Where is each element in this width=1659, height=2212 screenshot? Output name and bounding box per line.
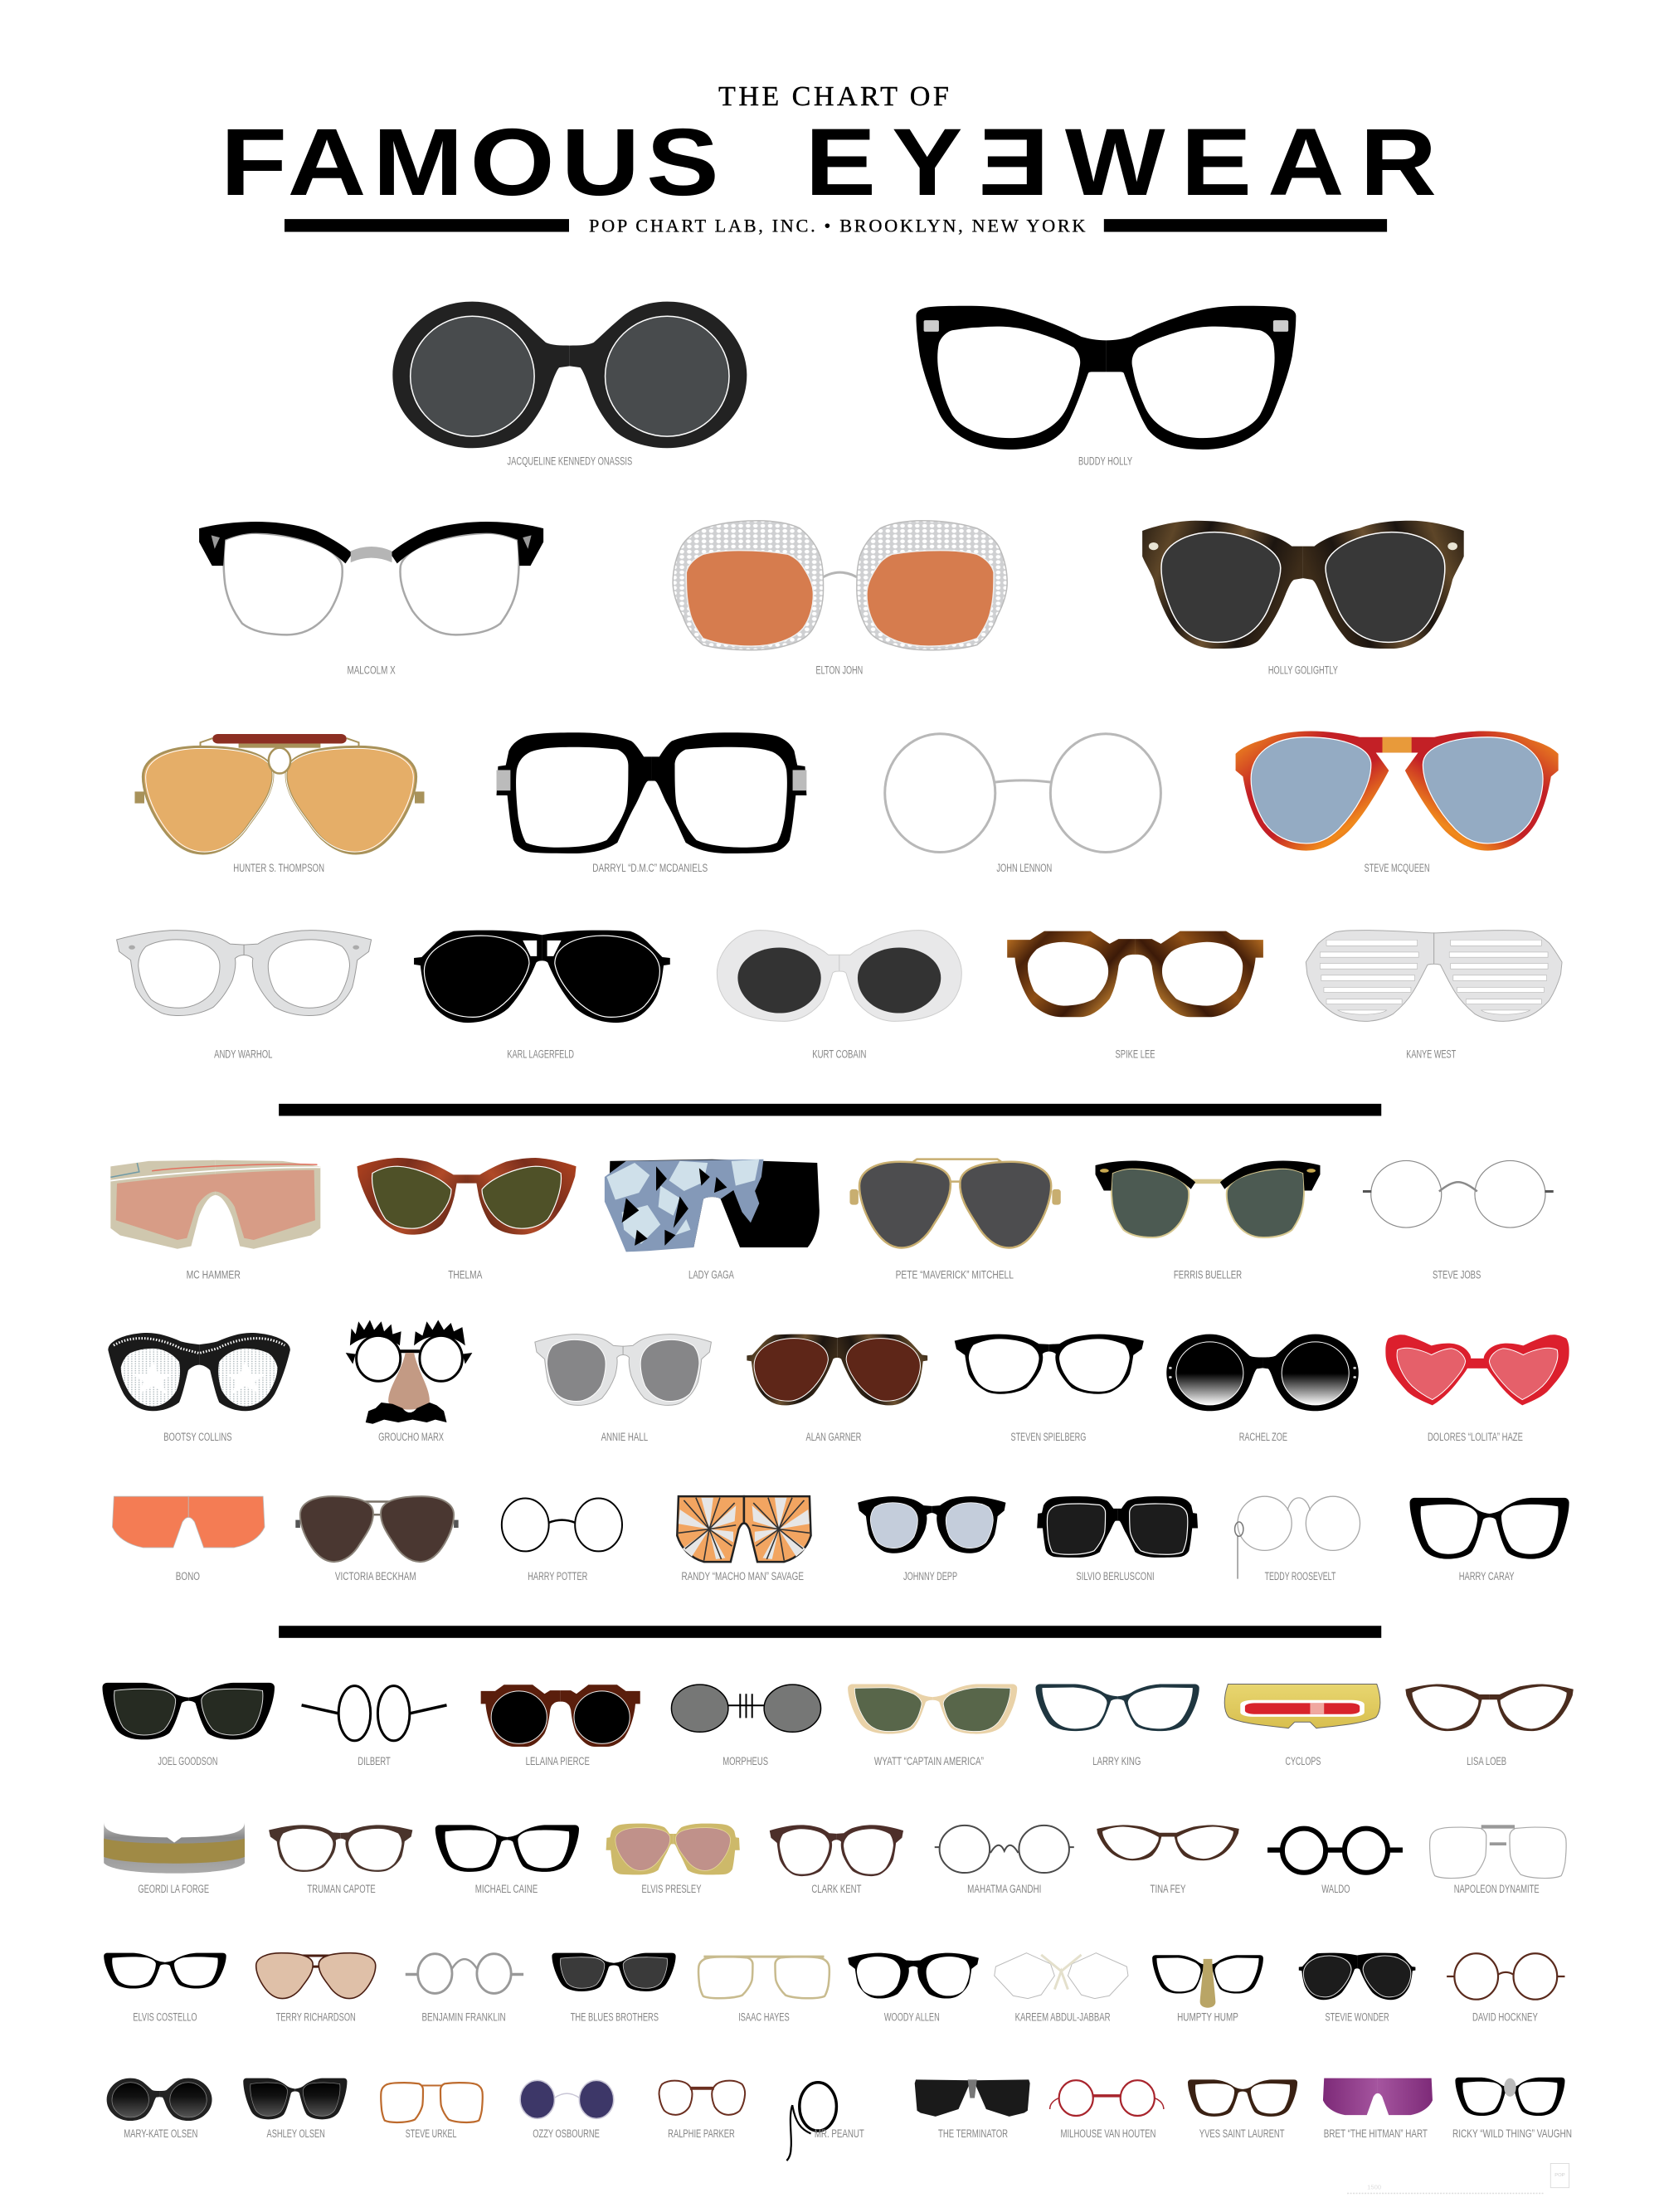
label: JOHN LENNON <box>996 862 1052 874</box>
title rule left <box>285 219 569 232</box>
title block <box>221 80 1452 236</box>
glasses: Hunter S. Thompson <box>134 734 425 874</box>
glasses: Tina Fey <box>1097 1825 1239 1895</box>
glasses: Mary-Kate Olsen <box>107 2078 212 2140</box>
glasses: Lelaina Pierce <box>481 1685 640 1767</box>
label: DILBERT <box>358 1755 391 1767</box>
main title: EYƎWEAR <box>805 109 1452 216</box>
kicker: the chart of: THE CHART OF <box>718 80 951 112</box>
mustache <box>366 1403 447 1424</box>
glasses: Spike Lee <box>1007 931 1263 1060</box>
label: TEDDY ROOSEVELT <box>1265 1570 1336 1582</box>
glasses: Humpty Hump <box>1152 1955 1263 2023</box>
label: CLARK KENT <box>811 1883 862 1895</box>
label: ANNIE HALL <box>601 1431 648 1443</box>
glasses: Lolita <box>1385 1334 1569 1443</box>
label: BUDDY HOLLY <box>1078 455 1132 467</box>
label: KAREEM ABDUL-JABBAR <box>1015 2010 1111 2023</box>
eyebrows <box>350 1320 465 1345</box>
label: DARRYL “D.M.C” MCDANIELS <box>592 862 708 874</box>
glasses: David Hockney <box>1447 1953 1564 2023</box>
label: RANDY “MACHO MAN” SAVAGE <box>681 1570 804 1582</box>
label: MALCOLM X <box>347 664 396 676</box>
label: MC HAMMER <box>187 1268 241 1281</box>
label: ELVIS COSTELLO <box>133 2010 197 2023</box>
glasses: Victoria Beckham <box>295 1496 459 1582</box>
glasses: Steve McQueen <box>1236 732 1559 874</box>
glasses: Ozzy Osbourne <box>520 2080 614 2140</box>
glasses: Woody Allen <box>848 1953 979 2023</box>
glasses: Wyatt <box>848 1685 1017 1767</box>
glasses: Holly Golightly <box>1142 521 1464 676</box>
label: MAHATMA GANDHI <box>967 1883 1041 1895</box>
glasses: Andy Warhol <box>117 931 372 1060</box>
glasses: Kareem Abdul-Jabbar <box>995 1953 1128 2023</box>
label: WYATT “CAPTAIN AMERICA” <box>874 1755 984 1767</box>
glasses: Maverick <box>849 1159 1061 1281</box>
glasses: Elton John <box>673 521 1007 676</box>
glasses: MC Hammer <box>110 1160 320 1281</box>
glasses: Benjamin Franklin <box>406 1954 523 2023</box>
glasses: Mr. Peanut monocle <box>786 2083 864 2161</box>
glasses: Bono <box>112 1496 265 1582</box>
glasses: Thelma <box>357 1158 577 1281</box>
glasses: Kurt Cobain <box>717 931 961 1060</box>
label: DAVID HOCKNEY <box>1472 2010 1538 2023</box>
glasses: Elvis Costello <box>104 1953 226 2023</box>
glasses: Alan Garner <box>747 1334 927 1443</box>
logo <box>1550 2163 1569 2188</box>
label: MARY-KATE OLSEN <box>124 2127 197 2140</box>
glasses: Cyclops <box>1224 1685 1380 1767</box>
glasses: Rachel Zoe <box>1166 1334 1359 1443</box>
label: SILVIO BERLUSCONI <box>1076 1570 1155 1582</box>
glasses: Ricky Vaughn <box>1452 2078 1572 2140</box>
glasses: Isaac Hayes <box>698 1957 830 2023</box>
label: BONO <box>176 1570 200 1582</box>
label: STEVE JOBS <box>1433 1268 1481 1281</box>
label: HARRY CARAY <box>1459 1570 1515 1582</box>
label: ELVIS PRESLEY <box>641 1883 701 1895</box>
label: HUMPTY HUMP <box>1177 2010 1238 2023</box>
glasses: Steve Urkel <box>381 2083 483 2140</box>
publisher line: POP CHART LAB, INC. • BROOKLYN, NEW YORK <box>589 216 1086 236</box>
label: NAPOLEON DYNAMITE <box>1454 1883 1540 1895</box>
glasses: Waldo <box>1267 1829 1403 1895</box>
label: ALAN GARNER <box>806 1431 861 1443</box>
label: MORPHEUS <box>722 1755 768 1767</box>
glasses: Steve Jobs <box>1363 1160 1554 1281</box>
glasses: Yves Saint Laurent <box>1188 2079 1297 2140</box>
title rule right <box>1104 219 1387 232</box>
label: RACHEL ZOE <box>1239 1431 1287 1443</box>
glasses: Harry Caray <box>1410 1498 1569 1582</box>
glasses: Michael Caine <box>435 1825 579 1895</box>
label: ELTON JOHN <box>816 664 863 676</box>
label: VICTORIA BECKHAM <box>335 1570 416 1582</box>
glasses: Bret Hart <box>1323 2078 1433 2140</box>
main title <box>221 109 1452 216</box>
glasses: Silvio Berlusconi <box>1037 1496 1198 1582</box>
glasses: Malcolm X <box>199 522 543 676</box>
glasses: Steven Spielberg <box>955 1334 1144 1443</box>
glasses: DMC <box>497 732 806 874</box>
label: RICKY “WILD THING” VAUGHN <box>1452 2127 1572 2140</box>
label: YVES SAINT LAURENT <box>1199 2127 1285 2140</box>
glasses: Geordi La Forge <box>104 1822 245 1895</box>
label: WOODY ALLEN <box>884 2010 940 2023</box>
glasses: Karl Lagerfeld <box>414 931 670 1060</box>
edition mark: 1500 <box>1367 2183 1381 2190</box>
glasses: The Terminator <box>915 2079 1030 2140</box>
label: HOLLY GOLIGHTLY <box>1268 664 1338 676</box>
glasses: Annie Hall <box>535 1334 711 1443</box>
label: PETE “MAVERICK” MITCHELL <box>896 1268 1014 1281</box>
glasses: Clark Kent <box>770 1825 903 1895</box>
label: CYCLOPS <box>1285 1755 1321 1767</box>
label: THE BLUES BROTHERS <box>571 2010 659 2023</box>
label: LARRY KING <box>1092 1755 1141 1767</box>
label: TINA FEY <box>1151 1883 1185 1895</box>
label: MR. PEANUT <box>815 2127 864 2140</box>
label: STEVE URKEL <box>406 2127 457 2140</box>
glasses: Lisa Loeb <box>1405 1685 1574 1767</box>
label: HARRY POTTER <box>528 1570 587 1582</box>
glasses: Blues Brothers <box>552 1953 676 2023</box>
label: BRET “THE HITMAN” HART <box>1324 2127 1428 2140</box>
label: HUNTER S. THOMPSON <box>233 862 324 874</box>
glasses: Ashley Olsen <box>243 2078 347 2140</box>
section divider <box>279 1104 1381 1116</box>
label: MICHAEL CAINE <box>475 1883 538 1895</box>
label: THE TERMINATOR <box>938 2127 1008 2140</box>
glasses: Terry Richardson <box>256 1953 376 2023</box>
label: FERRIS BUELLER <box>1174 1268 1242 1281</box>
glasses: Milhouse <box>1050 2080 1164 2140</box>
glasses: Teddy Roosevelt <box>1235 1496 1360 1582</box>
label: JOEL GOODSON <box>158 1755 217 1767</box>
label: ANDY WARHOL <box>214 1048 273 1060</box>
label: TERRY RICHARDSON <box>276 2010 356 2023</box>
glasses: Napoleon Dynamite <box>1430 1825 1566 1895</box>
section divider <box>279 1626 1381 1638</box>
glasses: Bootsy Collins <box>108 1333 290 1443</box>
glasses: Morpheus <box>671 1685 821 1767</box>
label: LADY GAGA <box>688 1268 735 1281</box>
glasses: Johnny Depp <box>858 1496 1005 1582</box>
label: GEORDI LA FORGE <box>138 1883 209 1895</box>
label: ASHLEY OLSEN <box>267 2127 325 2140</box>
glasses: Truman Capote <box>269 1825 412 1895</box>
logo: POP <box>1554 2173 1565 2178</box>
label: GROUCHO MARX <box>378 1431 444 1443</box>
nose <box>388 1353 430 1410</box>
glasses: Groucho Marx <box>346 1320 472 1443</box>
label: RALPHIE PARKER <box>668 2127 735 2140</box>
label: JOHNNY DEPP <box>903 1570 957 1582</box>
label: KURT COBAIN <box>812 1048 866 1060</box>
label: MILHOUSE VAN HOUTEN <box>1061 2127 1155 2140</box>
glasses: John Lennon <box>885 734 1160 874</box>
label: STEVIE WONDER <box>1325 2010 1389 2023</box>
label: SPIKE LEE <box>1116 1048 1155 1060</box>
label: ISAAC HAYES <box>738 2010 790 2023</box>
label: STEVE MCQUEEN <box>1365 862 1430 874</box>
glasses: Jackie O <box>392 302 747 467</box>
glasses: Kanye West <box>1306 931 1562 1060</box>
glasses: Buddy Holly <box>916 306 1296 467</box>
glasses: Elvis Presley <box>606 1824 740 1895</box>
footer: print number and logo <box>1347 2163 1569 2194</box>
glasses: Ferris Bueller <box>1096 1160 1320 1281</box>
label: THELMA <box>448 1268 483 1281</box>
glasses: Larry King <box>1035 1685 1199 1767</box>
label: BOOTSY COLLINS <box>163 1431 232 1443</box>
label: TRUMAN CAPOTE <box>307 1883 376 1895</box>
label: LELAINA PIERCE <box>526 1755 590 1767</box>
glasses: Mahatma Gandhi <box>935 1826 1074 1895</box>
glasses: Harry Potter <box>502 1499 622 1582</box>
label: OZZY OSBOURNE <box>533 2127 600 2140</box>
glasses: Stevie Wonder <box>1299 1953 1415 2023</box>
glasses: Dilbert <box>302 1686 447 1767</box>
label: JACQUELINE KENNEDY ONASSIS <box>507 455 632 467</box>
label: KARL LAGERFELD <box>507 1048 574 1060</box>
glasses: Joel Goodson <box>102 1683 275 1767</box>
glasses: Ralphie Parker <box>659 2081 745 2140</box>
main title: FAMOUS <box>221 109 726 216</box>
label: WALDO <box>1321 1883 1350 1895</box>
label: STEVEN SPIELBERG <box>1010 1431 1086 1443</box>
glasses: Macho Man <box>677 1496 811 1582</box>
label: LISA LOEB <box>1467 1755 1506 1767</box>
glasses: Lady Gaga <box>605 1159 820 1281</box>
label: KANYE WEST <box>1406 1048 1457 1060</box>
label: DOLORES “LOLITA” HAZE <box>1428 1431 1523 1443</box>
signature line <box>1347 2193 1544 2195</box>
label: BENJAMIN FRANKLIN <box>421 2010 506 2023</box>
